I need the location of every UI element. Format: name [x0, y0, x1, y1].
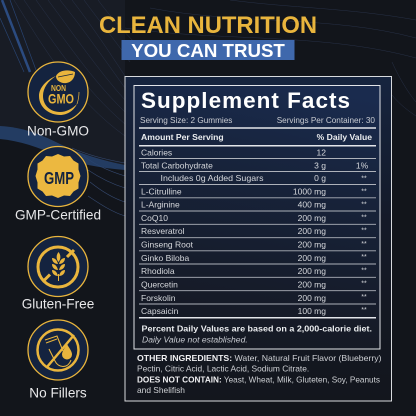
- nutrient rows: Ginko Biloba: [141, 253, 189, 263]
- nutrient rows: L-Arginine: [141, 200, 180, 210]
- badge: GMP-Certified: GMP: [44, 168, 74, 188]
- heading banner: you can trust: YOU CAN TRUST: [131, 40, 285, 61]
- icon: leaf and swoosh: [39, 70, 79, 115]
- badge: GMP-Certified: GMP-Certified: [15, 208, 101, 222]
- ingredients text: Pectin, Citric Acid, Lactic Acid, Sodium Citrate.: [137, 364, 309, 374]
- badge: Gluten-Free: Gluten-Free: [22, 296, 94, 312]
- daily value markers: [361, 176, 367, 314]
- badge: No Fillers: No Fillers: [29, 386, 87, 400]
- badge: No Fillers: [28, 320, 88, 400]
- nutrient rows: 200 mg: [298, 280, 326, 290]
- icon: gold seal: [36, 154, 80, 198]
- daily value markers: **: [361, 228, 367, 234]
- nutrient rows: Includes 0g Added Sugars: [160, 173, 264, 183]
- ingredients text: [137, 353, 382, 395]
- table header row: Amount Per Serving: [141, 132, 224, 142]
- nutrient rows: 1000 mg: [293, 186, 326, 196]
- nutrient rows: 100 mg: [298, 306, 326, 316]
- nutrient rows: 200 mg: [298, 253, 326, 263]
- serving info: [140, 116, 375, 125]
- daily value markers: **: [361, 307, 367, 314]
- ingredients text: and Shelifish: [137, 385, 185, 395]
- nutrient rows: 1%: [356, 160, 369, 170]
- badge: GMP-Certified: [15, 146, 101, 222]
- panel: supplement facts outer box: [125, 76, 392, 401]
- nutrient rows: 400 mg: [298, 200, 326, 210]
- nutrient rows: 3 g: [314, 160, 326, 170]
- nutrient rows: 200 mg: [298, 226, 326, 236]
- serving info: Serving Size: 2 Gummies: [140, 116, 232, 125]
- daily value markers: **: [361, 268, 367, 274]
- daily value markers: **: [361, 254, 367, 261]
- nutrient rows: 12: [317, 147, 326, 157]
- badge: Non-GMO: [27, 62, 89, 138]
- table footnote: [142, 324, 372, 344]
- table header row: % Daily Value: [317, 132, 372, 142]
- nutrient rows: Total Carbohydrate: [141, 160, 213, 170]
- nutrient rows: Forskolin: [141, 293, 176, 303]
- table footnote: Percent Daily Values are based on a 2,000-calorie diet.: [142, 324, 372, 334]
- nutrient rows: 200 mg: [298, 240, 326, 250]
- title: [99, 12, 317, 61]
- nutrient rows: Calories: [141, 147, 172, 157]
- nutrient rows: Rhodiola: [141, 266, 175, 276]
- heading: clean nutrition: CLEAN NUTRITION: [99, 12, 317, 39]
- nutrient rows: Resveratrol: [141, 226, 185, 236]
- table header row: [141, 132, 372, 142]
- icon: crossed wheat: [38, 247, 78, 287]
- nutrient rows: 200 mg: [298, 213, 326, 223]
- badge: Non-GMO: GMO: [48, 90, 74, 106]
- icon: crossed tube and drop: [38, 330, 78, 370]
- nutrient rows: Quercetin: [141, 280, 178, 290]
- serving info: Servings Per Container: 30: [277, 116, 375, 125]
- table footnote: Daily Value not established.: [142, 334, 248, 344]
- daily value markers: **: [361, 280, 367, 288]
- daily value markers: **: [361, 202, 367, 208]
- daily value markers: **: [361, 294, 367, 301]
- daily value markers: **: [361, 241, 367, 248]
- nutrient rows: CoQ10: [141, 213, 168, 223]
- nutrient rows: Capsaicin: [141, 306, 179, 316]
- panel: facts table: [134, 86, 380, 349]
- badge: Gluten-Free: [22, 236, 94, 312]
- daily value markers: **: [361, 176, 367, 182]
- nutrient rows: [141, 147, 369, 316]
- badge: Non-GMO: NON: [51, 84, 66, 93]
- nutrient rows: 200 mg: [298, 293, 326, 303]
- ingredients text: DOES NOT CONTAIN: Yeast, Wheat, Milk, Gluteten, Soy, Peanuts: [137, 374, 380, 384]
- ingredients text: OTHER INGREDIENTS: Water, Natural Fruit Flavor (Blueberry): [137, 353, 382, 363]
- daily value markers: **: [361, 188, 367, 196]
- nutrient rows: L-Citrulline: [141, 186, 182, 196]
- nutrient rows: 0 g: [314, 173, 326, 183]
- table heading: Supplement Facts: [141, 88, 350, 113]
- daily value markers: **: [361, 214, 367, 222]
- badge: Non-GMO: Non-GMO: [27, 124, 89, 138]
- nutrient rows: 200 mg: [298, 266, 326, 276]
- nutrient rows: Ginseng Root: [141, 240, 194, 250]
